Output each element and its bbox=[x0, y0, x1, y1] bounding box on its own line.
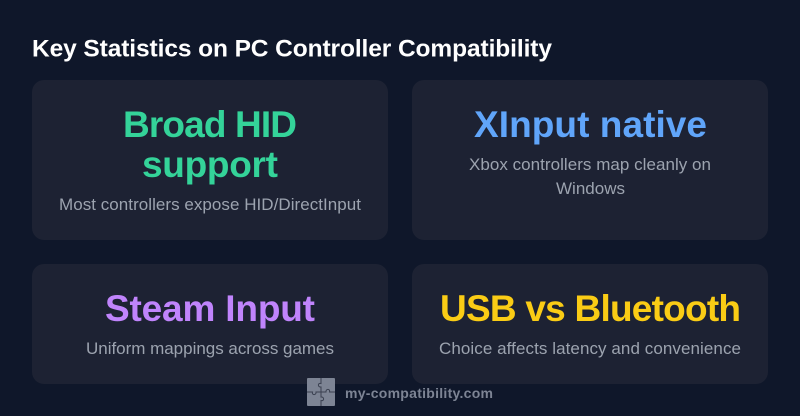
stat heading: Steam Input: Steam Input bbox=[105, 288, 315, 329]
stat heading: USB vs Bluetooth: USB vs Bluetooth bbox=[440, 288, 741, 329]
stat heading: XInput native: XInput native bbox=[474, 104, 707, 145]
description: HID/DirectInput: Most controllers expose HID/DirectInput bbox=[59, 195, 361, 214]
panel: USB vs Bluetooth bbox=[412, 264, 768, 384]
stat heading: broad HID support: Broad HID bbox=[123, 104, 297, 145]
panel: XInput native bbox=[412, 80, 768, 240]
footer branding bbox=[307, 378, 493, 406]
website name: my-compatibility.com bbox=[345, 385, 493, 401]
description: Xbox controllers: Xbox controllers map cleanly on bbox=[469, 155, 711, 174]
description: Xbox controllers bbox=[469, 155, 711, 198]
panel: broad HID support bbox=[32, 80, 388, 240]
description: uniform mappings: Uniform mappings across games bbox=[86, 339, 334, 358]
title: Key Statistics on PC Controller Compatibility bbox=[32, 36, 552, 62]
icon: puzzle pieces bbox=[307, 378, 335, 406]
stat heading: broad HID support bbox=[123, 104, 297, 185]
description: Xbox controllers: Windows bbox=[556, 179, 625, 198]
panel: Steam Input bbox=[32, 264, 388, 384]
description: latency and convenience: Choice affects latency and convenience bbox=[439, 339, 741, 358]
stat heading: broad HID support: support bbox=[142, 144, 278, 185]
